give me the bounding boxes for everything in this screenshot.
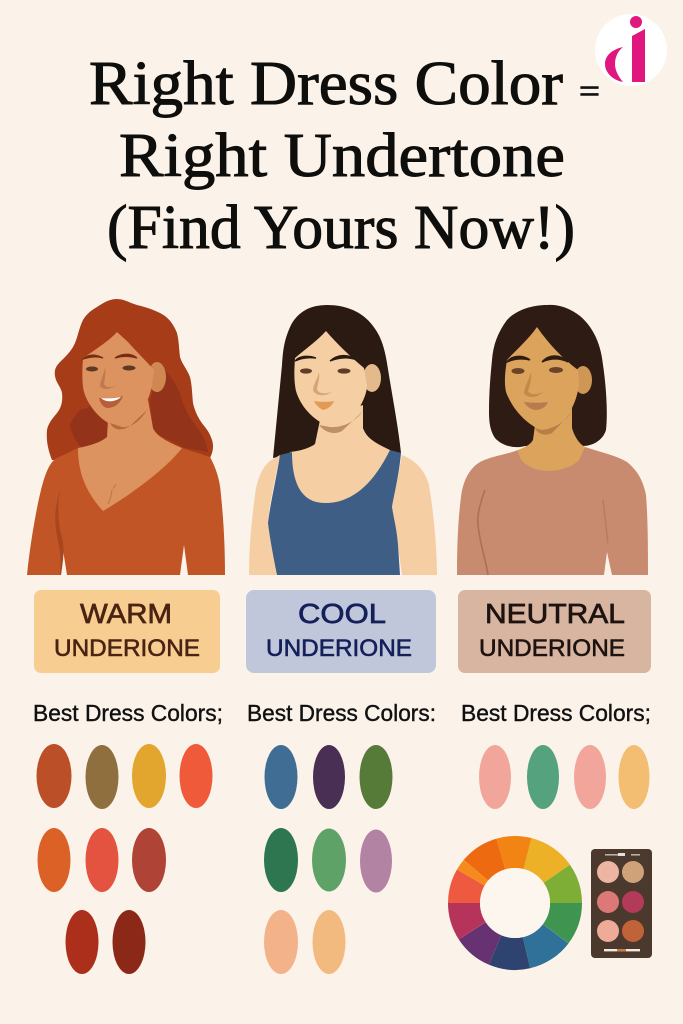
eyes xyxy=(300,368,312,374)
face xyxy=(505,327,579,430)
label: neutral undertone: UNDERIONE xyxy=(479,635,625,662)
lips xyxy=(314,401,334,410)
swatches: warm xyxy=(36,744,212,974)
ear xyxy=(363,364,381,392)
makeup palette xyxy=(591,849,652,958)
tank top xyxy=(268,450,401,575)
label: warm undertone xyxy=(34,590,220,673)
face xyxy=(82,332,154,426)
sleeve folds xyxy=(478,490,488,575)
chin shadow xyxy=(319,411,363,433)
label: neutral undertone xyxy=(458,590,651,673)
label: warm undertone: WARM xyxy=(80,598,172,629)
mouth xyxy=(99,396,123,408)
chin shadow xyxy=(535,412,572,435)
figure: warm undertone woman xyxy=(27,299,225,575)
brows xyxy=(83,354,137,359)
swatches: cool xyxy=(264,745,392,974)
label: cool undertone: COOL xyxy=(298,598,386,629)
brows xyxy=(507,356,568,362)
neck xyxy=(518,408,585,471)
sweater xyxy=(457,447,648,575)
color wheel xyxy=(443,831,587,975)
label: neutral undertone: NEUTRAL xyxy=(485,598,625,629)
figure: cool undertone woman xyxy=(249,305,437,575)
nose xyxy=(313,372,332,395)
hair xyxy=(273,305,401,458)
lips xyxy=(524,402,548,410)
eyes xyxy=(86,366,98,372)
ear xyxy=(574,366,592,394)
shirt xyxy=(27,448,225,575)
hair xyxy=(47,299,213,460)
swatches: neutral xyxy=(479,745,650,809)
heading: cool best dress colors: Best Dress Colors: xyxy=(247,700,436,726)
label: cool undertone xyxy=(246,590,436,673)
chin shadow xyxy=(110,410,147,429)
neck and chest xyxy=(78,400,182,511)
ear xyxy=(148,362,166,392)
nose xyxy=(524,372,543,397)
title: (Find Yours Now!) xyxy=(107,194,575,262)
figure: neutral undertone woman xyxy=(457,305,648,575)
heading: neutral best dress colors: Best Dress Colors; xyxy=(461,700,651,726)
label: warm undertone: UNDERIONE xyxy=(54,635,200,662)
title: = xyxy=(579,75,600,106)
hair xyxy=(489,305,607,447)
nose xyxy=(100,368,117,389)
title: Right Undertone xyxy=(119,122,565,190)
brows xyxy=(295,356,357,361)
label: cool undertone: UNDERIONE xyxy=(266,635,412,662)
arms xyxy=(249,455,280,575)
face xyxy=(294,331,367,427)
neck and chest xyxy=(290,405,392,515)
heading: warm best dress colors: Best Dress Colors; xyxy=(33,700,223,726)
logo xyxy=(595,14,667,86)
eyes xyxy=(512,368,524,374)
title: Right Dress Color xyxy=(89,50,563,118)
title xyxy=(89,50,600,262)
